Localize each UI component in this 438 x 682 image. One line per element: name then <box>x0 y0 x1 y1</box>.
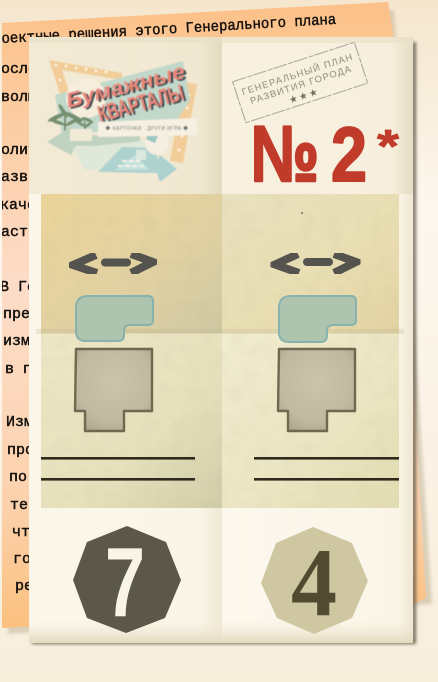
card number: №2*: * <box>377 120 399 172</box>
logo: Бумажные кварталы <box>47 59 197 182</box>
logo subtitle <box>95 78 189 129</box>
shape: gray piece <box>75 349 152 431</box>
shape: blue piece <box>279 296 356 342</box>
column: left <box>41 254 195 481</box>
badge: dark number 7: 7 <box>105 527 145 637</box>
typewritten text lines: Изменения <box>6 414 87 431</box>
card: master plan №2 <box>29 37 413 643</box>
panel background with folds <box>36 194 404 508</box>
stamp: генеральный план: РАЗВИТИЯ ГОРОДА <box>249 63 353 106</box>
logo banner <box>98 118 197 137</box>
card paper <box>29 37 413 643</box>
typewritten text lines: города <box>13 551 67 568</box>
card number: №2*: 2 <box>331 112 367 198</box>
typewritten text lines: изменения <box>3 333 84 350</box>
right arrow with waves <box>98 147 177 182</box>
icon: double arrow <box>275 254 356 273</box>
icon: double arrow <box>73 254 153 273</box>
line: upper rule <box>254 457 399 460</box>
column: right <box>254 254 399 481</box>
stamp: генеральный план <box>233 42 368 123</box>
teal backdrop <box>55 61 190 134</box>
lower sign <box>73 138 172 170</box>
shape: gray piece <box>278 349 355 431</box>
typewritten text lines: по-новому <box>9 469 90 486</box>
line: lower rule <box>41 478 195 481</box>
badge: light number 4: 4 <box>291 529 337 637</box>
shape: blue piece <box>76 296 153 341</box>
badge: dark number 7 <box>73 526 181 637</box>
marquee frame <box>49 60 197 163</box>
palm trees <box>47 103 94 133</box>
typewritten text lines: ремонт <box>15 578 69 595</box>
logo title: Бумажные <box>66 61 190 114</box>
card number: №2*: № <box>251 109 319 198</box>
typewritten text lines: В Генеральном <box>0 279 117 296</box>
line: lower rule <box>254 478 399 481</box>
sun <box>66 78 106 118</box>
badge: light number 4 <box>261 527 368 637</box>
typewritten text lines: проекта <box>7 442 70 459</box>
left arrow <box>47 126 140 155</box>
typewritten text lines <box>0 12 337 595</box>
logo title: Бумажные <box>63 60 188 113</box>
panel: score track <box>36 194 404 508</box>
logo subtitle: КВАРТАЛЫ <box>97 80 189 128</box>
line: upper rule <box>41 457 195 460</box>
card shadow <box>32 42 416 644</box>
beach umbrella <box>145 131 169 155</box>
typewritten text lines: территории <box>10 497 100 514</box>
typewritten text lines: чтобы <box>12 524 57 541</box>
stamp: генеральный план: ГЕНЕРАЛЬНЫЙ ПЛАН <box>240 51 355 97</box>
logo banner: ◆ КАРТОЧКИ · ДРУГИ ИГРА ◆ <box>105 126 189 132</box>
card number: №2* <box>251 109 399 198</box>
typewritten text lines: качество <box>0 197 72 214</box>
stamp: генеральный план: ★★★ <box>288 87 321 105</box>
logo subtitle: КВАРТАЛЫ <box>95 79 186 127</box>
typewritten text lines: предусмотрены <box>3 306 120 323</box>
typewritten text lines: в плане <box>5 361 68 378</box>
